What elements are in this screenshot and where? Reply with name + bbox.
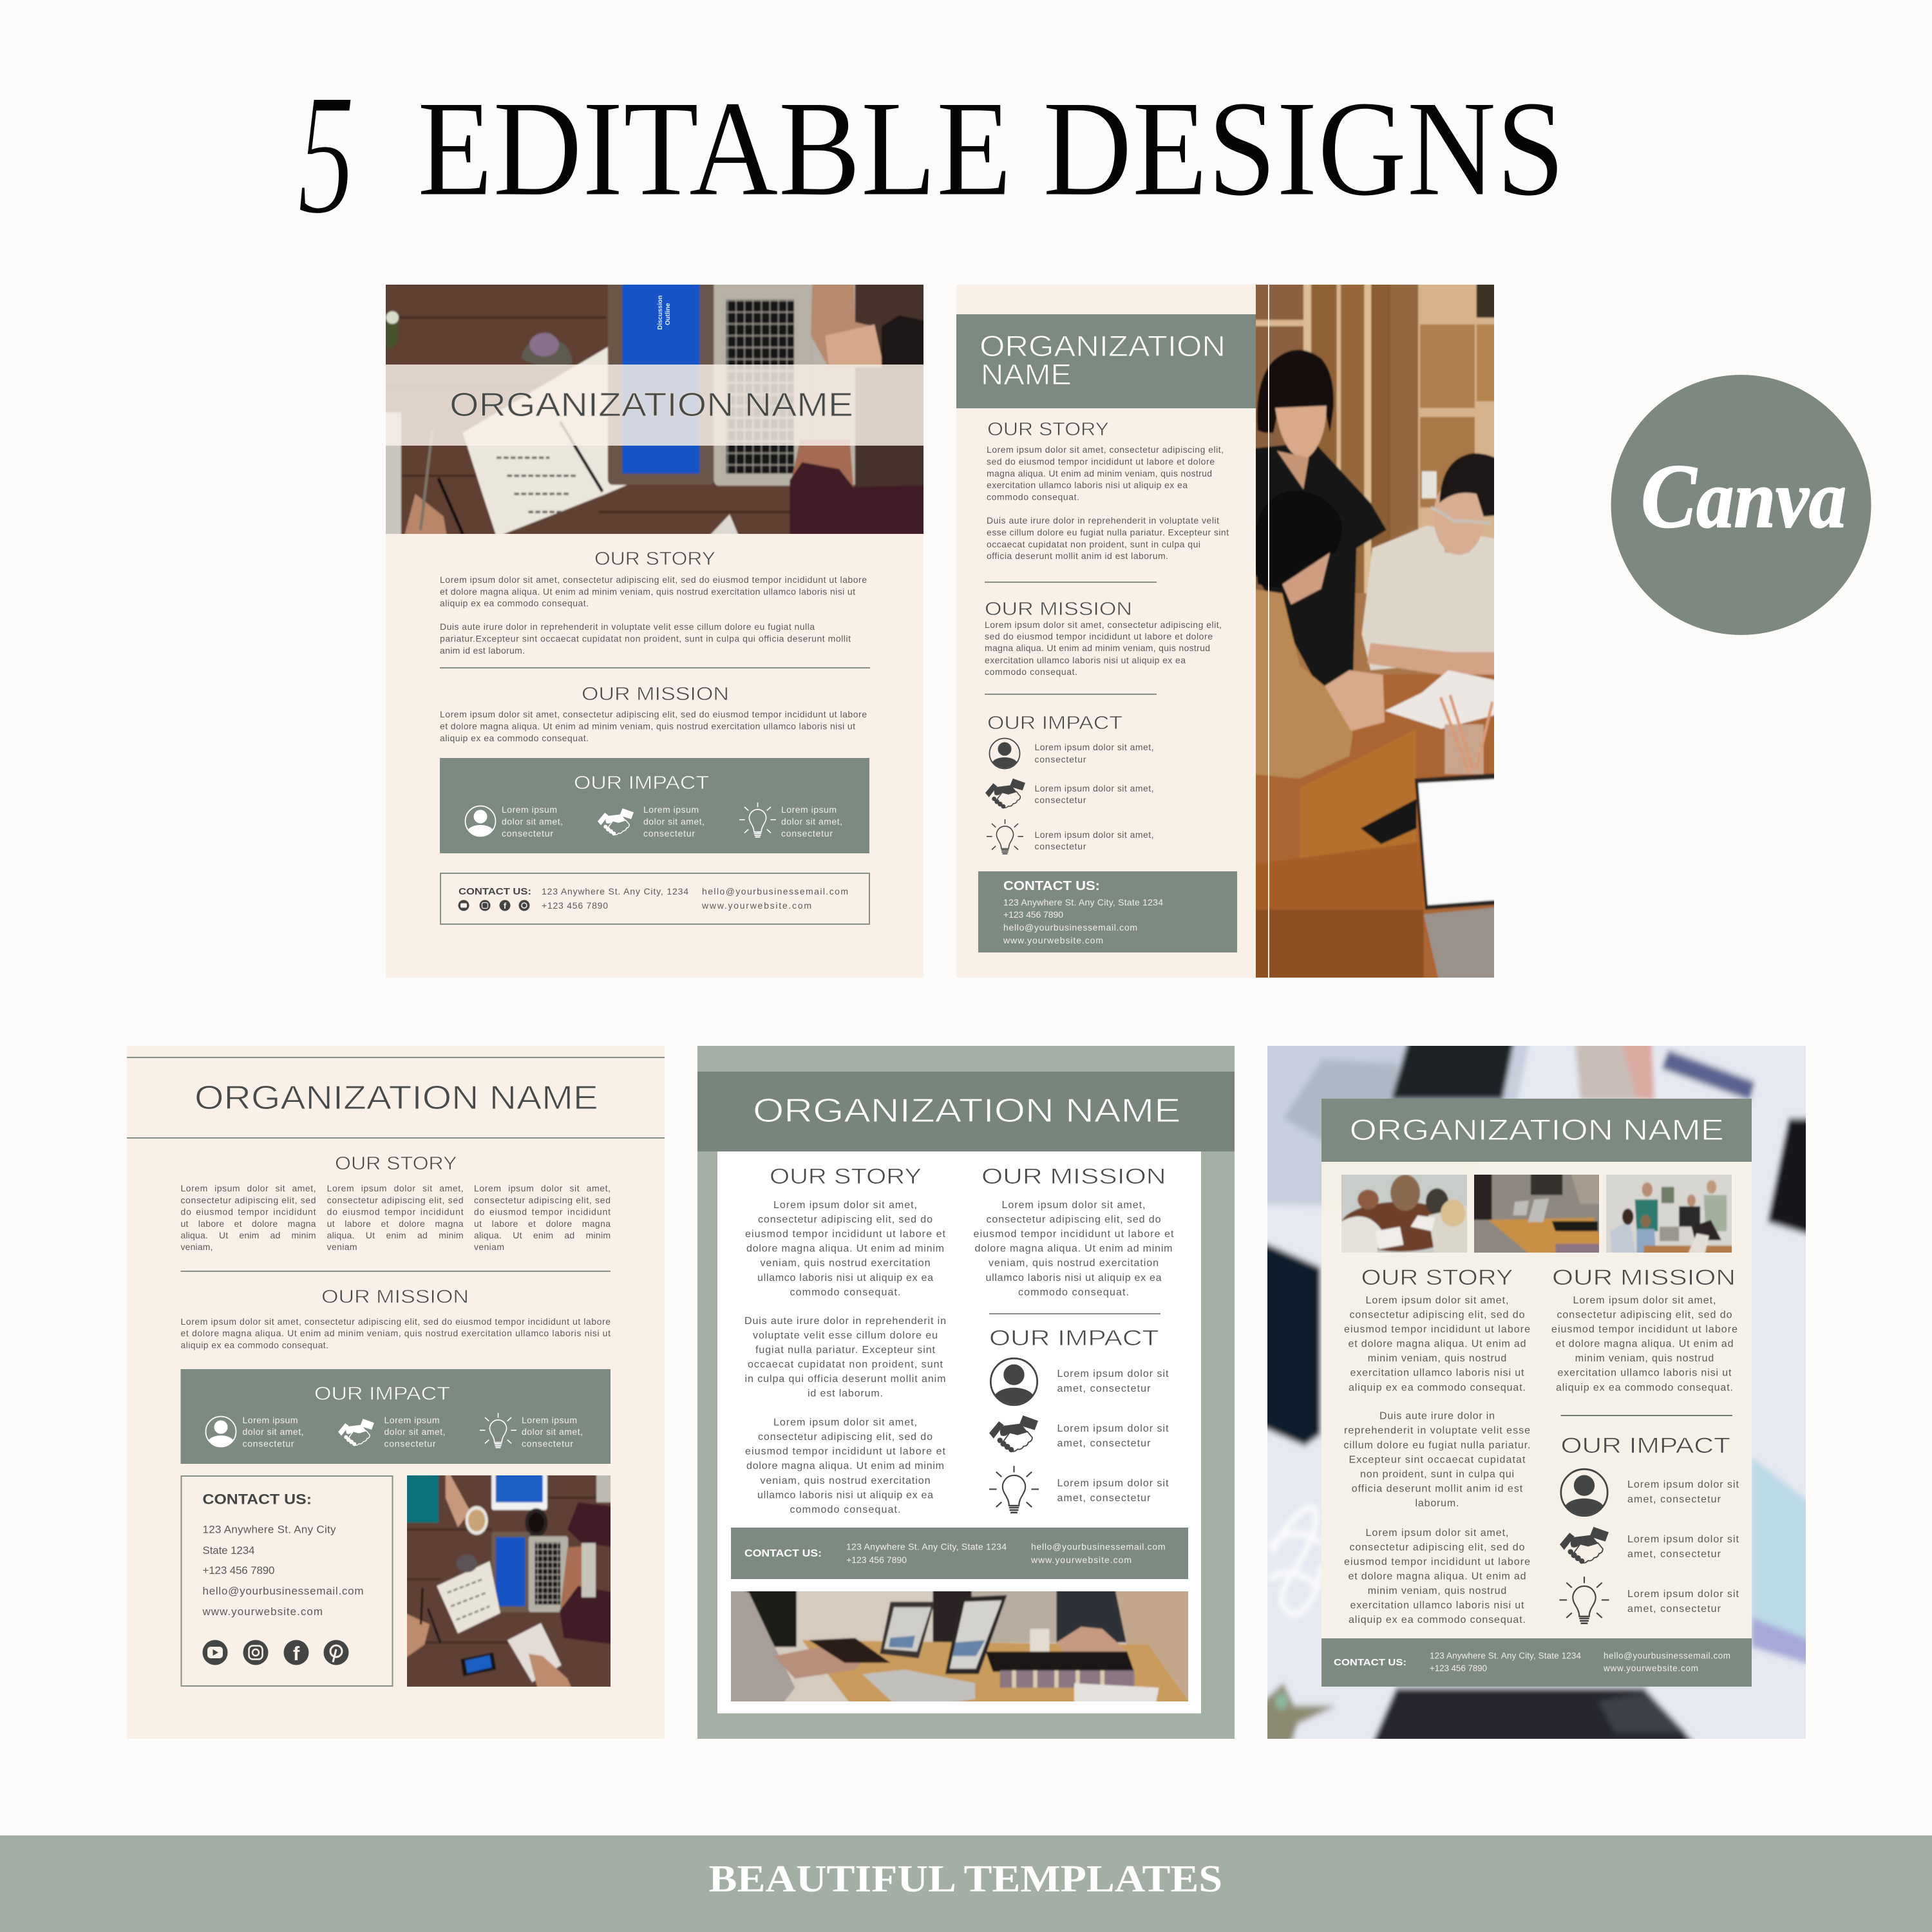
text: story: veniam, quis nostrud exercitation: [760, 1258, 930, 1269]
text: story: eiusmod tempor incididunt ut labore et: [745, 1446, 946, 1457]
contact box: CONTACT US:: [1003, 879, 1100, 893]
text: story: ullamco laboris nisi ut aliquip ex ea: [757, 1273, 933, 1283]
header: organization name: ORGANIZATION NAME: [1350, 1113, 1724, 1146]
text: story: exercitation ullamco laboris nisi ut aliquip ex ea: [987, 480, 1188, 490]
list: impact items: amet, consectetur: [1057, 1383, 1151, 1394]
icon: light bulb: [1560, 1577, 1609, 1624]
list: impact items: Lorem ipsum dolor sit: [1057, 1423, 1169, 1434]
text: story column 2: [327, 1183, 464, 1252]
list: impact items: [1560, 1469, 1739, 1624]
heading: our mission: OUR MISSION: [1552, 1265, 1736, 1290]
list: impact items: Lorem ipsum dolor sit amet,: [1034, 742, 1154, 752]
list: impact items: amet, consectetur: [1627, 1549, 1721, 1560]
text: mission: exercitation ullamco laboris nisi ut aliquip ex ea: [985, 655, 1186, 665]
list: impact items: amet, consectetur: [1627, 1604, 1721, 1615]
icons: social: [202, 1640, 349, 1665]
panel: design 4: [697, 1046, 1235, 1739]
text: story: [744, 1200, 946, 1515]
text: mission: aliquip ex ea commodo consequat.: [180, 1340, 328, 1350]
panel: our impact: OUR IMPACT: [574, 773, 709, 793]
contact box: 123 Anywhere St. Any City: [202, 1524, 336, 1535]
text: story: Lorem ipsum dolor sit amet, consectetur adipiscing elit,: [987, 444, 1224, 455]
text: story column 1: do eiusmod tempor incididunt: [180, 1207, 316, 1217]
title band: [386, 365, 923, 446]
contact bar: [731, 1528, 1188, 1579]
text: story column 3: ut labore et dolore magna: [474, 1218, 611, 1229]
text: story: Duis aute irure dolor in reprehenderit in voluptate velit: [987, 515, 1219, 526]
text: story: Duis aute irure dolor in reprehenderit in: [744, 1316, 946, 1327]
text: story column 3: consectetur adipiscing elit, sed: [474, 1195, 611, 1206]
list: impact items: [989, 1358, 1169, 1513]
contact bar: www.yourwebsite.com: [1030, 1555, 1132, 1565]
text: mission: veniam, quis nostrud exercitation: [989, 1258, 1159, 1269]
text: story column 3: [474, 1183, 611, 1252]
contact bar: 123 Anywhere St. Any City, State 1234: [1430, 1651, 1581, 1660]
contact box: +123 456 7890: [202, 1564, 274, 1577]
panel: our impact: Lorem ipsum: [643, 804, 699, 815]
text: story column 1: ut labore et dolore magna: [180, 1218, 316, 1229]
text: mission: [1551, 1295, 1738, 1394]
header: organization name: NAME: [981, 358, 1072, 391]
panel: our impact: dolor sit amet,: [384, 1426, 446, 1437]
text: story: dolore magna aliqua. Ut enim ad minim: [746, 1243, 944, 1255]
text: mission: et dolore magna aliqua. Ut enim ad: [1556, 1338, 1734, 1350]
text: story: aliquip ex ea commodo consequat.: [1349, 1382, 1526, 1394]
heading: our story: OUR STORY: [987, 419, 1109, 440]
text: story: [987, 444, 1229, 561]
icon: person: [206, 1417, 236, 1446]
text: story: [1343, 1295, 1530, 1625]
heading: our mission: OUR MISSION: [985, 599, 1132, 620]
text: story: et dolore magna aliqua. Ut enim ad: [1349, 1338, 1526, 1350]
text: story: non proident, sunt in culpa qui: [1360, 1469, 1514, 1480]
contact box: CONTACT US:: [202, 1492, 312, 1507]
panel: our impact: Lorem ipsum: [384, 1415, 439, 1425]
footer band: BEAUTIFUL TEMPLATES: [708, 1857, 1222, 1900]
main title: [298, 58, 1565, 251]
heading: organization name: ORGANIZATION NAME: [194, 1079, 598, 1117]
text: mission: eiusmod tempor incididunt ut labore et: [974, 1229, 1174, 1240]
text: story column 1: Lorem ipsum dolor sit amet,: [180, 1183, 316, 1193]
text: story: Lorem ipsum dolor sit amet,: [773, 1200, 917, 1211]
icon: person: [465, 806, 496, 836]
text: story column 1: [180, 1183, 316, 1252]
text: story column 2: do eiusmod tempor incididunt: [327, 1207, 464, 1217]
text: story column 2: ut labore et dolore magna: [327, 1218, 464, 1229]
text: mission: aliquip ex ea commodo consequat.: [1556, 1382, 1733, 1394]
text: mission: aliquip ex ea commodo consequat.: [440, 733, 589, 743]
icon: handshake: [1560, 1527, 1609, 1564]
contact box: 123 Anywhere St. Any City, State 1234: [1003, 897, 1163, 907]
footer band: [0, 1835, 1932, 1932]
header: organization name: ORGANIZATION NAME: [753, 1092, 1181, 1130]
text: mission: dolore magna aliqua. Ut enim ad minim: [975, 1243, 1172, 1255]
list: impact items: Lorem ipsum dolor sit: [1627, 1589, 1739, 1600]
icon: light bulb: [989, 1466, 1039, 1513]
photo: overhead meeting: [407, 1475, 611, 1687]
contact box: [978, 871, 1237, 952]
list: impact items: Lorem ipsum dolor sit: [1057, 1368, 1169, 1379]
text: story: Lorem ipsum dolor sit amet,: [773, 1417, 917, 1428]
text: story column 3: Lorem ipsum dolor sit amet,: [474, 1183, 611, 1193]
contact box: 123 Anywhere St. Any City, 1234: [542, 886, 688, 896]
text: story: commodo consequat.: [987, 492, 1079, 502]
contact box: hello@yourbusinessemail.com: [1003, 922, 1137, 933]
contact box: State 1234: [202, 1544, 255, 1557]
panel: our impact: consectetur: [384, 1439, 436, 1449]
text: story: laborum.: [1416, 1498, 1459, 1509]
contact bar: +123 456 7890: [1430, 1663, 1487, 1673]
panel: our impact: consectetur: [643, 828, 695, 838]
panel: our impact: Lorem ipsum: [522, 1415, 577, 1425]
text: story: aliquip ex ea commodo consequat.: [440, 598, 589, 608]
icon: person: [1561, 1469, 1607, 1516]
panel: our impact: consectetur: [242, 1439, 294, 1449]
text: story column 3: aliqua. Ut enim ad minim: [474, 1230, 611, 1240]
text: story: minim veniam, quis nostrud: [1368, 1586, 1506, 1596]
text: mission: et dolore magna aliqua. Ut enim ad minim veniam, quis nostrud exercitation ullamco laboris nisi ut: [440, 721, 855, 732]
text: story: officia deserunt mollit anim id est: [1352, 1484, 1523, 1494]
panel: our impact: dolor sit amet,: [502, 817, 563, 827]
text: mission: Lorem ipsum dolor sit amet, consectetur adipiscing elit, sed do eiusmod tempor incididunt ut labore: [440, 709, 867, 719]
photo: laptop on wooden desk: Outline: [665, 303, 672, 325]
text: mission: minim veniam, quis nostrud: [1575, 1353, 1714, 1364]
panel: our impact: dolor sit amet,: [781, 817, 842, 827]
text: story: et dolore magna aliqua. Ut enim ad: [1349, 1571, 1526, 1582]
list: impact items: consectetur: [1034, 841, 1086, 851]
text: story column 3: veniam: [474, 1242, 504, 1252]
text: mission: magna aliqua. Ut enim ad minim veniam, quis nostrud: [985, 643, 1210, 653]
contact bar: hello@yourbusinessemail.com: [1031, 1542, 1166, 1552]
panel: design 3: [127, 1046, 665, 1739]
text: story: ullamco laboris nisi ut aliquip ex ea: [757, 1490, 933, 1501]
text: mission: commodo consequat.: [1018, 1287, 1129, 1298]
text: story: voluptate velit esse cillum dolore eu: [753, 1331, 938, 1341]
text: story: occaecat cupidatat non proident, sunt in culpa qui: [987, 539, 1200, 549]
text: mission: ullamco laboris nisi ut aliquip ex ea: [985, 1273, 1162, 1283]
photo: laptops on a table: [731, 1591, 1188, 1701]
icon: handshake: [598, 808, 634, 835]
text: story column 2: consectetur adipiscing elit, sed: [327, 1195, 464, 1206]
contact box: www.yourwebsite.com: [202, 1605, 323, 1618]
photo: team around laptop: [1598, 1168, 1739, 1258]
text: story: veniam, quis nostrud exercitation: [760, 1475, 930, 1486]
contact bar: CONTACT US:: [1334, 1657, 1406, 1668]
contact bar: [1321, 1638, 1752, 1687]
text: story column 2: Lorem ipsum dolor sit amet,: [327, 1183, 464, 1193]
panel: our impact: [440, 758, 869, 853]
text: story column 2: aliqua. Ut enim ad minim: [327, 1230, 464, 1240]
text: story: exercitation ullamco laboris nisi ut: [1350, 1600, 1524, 1611]
text: story: eiusmod tempor incididunt ut labore et: [745, 1229, 946, 1240]
contact box: hello@yourbusinessemail.com: [702, 886, 848, 896]
photo: team meeting: [1333, 1168, 1474, 1258]
text: story: exercitation ullamco laboris nisi ut: [1350, 1368, 1524, 1378]
panel: design 1: [373, 268, 947, 978]
badge: Canva: Canva: [1641, 445, 1846, 547]
text: story: id est laborum.: [808, 1388, 883, 1399]
text: story: pariatur.Excepteur sint occaecat cupidatat non proident, sunt in culpa qui officia deserunt mollit: [440, 634, 851, 644]
text: story: Excepteur sint occaecat cupidatat: [1349, 1454, 1526, 1466]
contact bar: 123 Anywhere St. Any City, State 1234: [846, 1542, 1007, 1552]
icon: handshake: [989, 1416, 1038, 1452]
list: impact items: Lorem ipsum dolor sit: [1627, 1534, 1739, 1545]
photo: team around a table: [1256, 285, 1494, 978]
badge: Canva: [1611, 375, 1871, 635]
list: impact items: consectetur: [1034, 754, 1086, 764]
header: organization name: [697, 1072, 1235, 1151]
text: story column 1: veniam,: [180, 1242, 213, 1252]
contact box: www.yourwebsite.com: [701, 900, 811, 911]
text: story: occaecat cupidatat non proident, sunt: [748, 1359, 943, 1370]
heading: our story: OUR STORY: [770, 1164, 922, 1189]
text: story: minim veniam, quis nostrud: [1368, 1353, 1506, 1364]
text: story: magna aliqua. Ut enim ad minim veniam, quis nostrud: [987, 468, 1212, 478]
list: impact items: Lorem ipsum dolor sit: [1057, 1478, 1169, 1489]
heading: our story: OUR STORY: [594, 549, 715, 569]
text: story: commodo consequat.: [790, 1287, 900, 1298]
text: story: reprehenderit in voluptate velit esse: [1344, 1425, 1530, 1436]
icons: social: [459, 900, 529, 911]
header: organization name: [1321, 1099, 1752, 1162]
heading: our mission: OUR MISSION: [981, 1164, 1166, 1189]
photo: laptops on a table: [1467, 1168, 1605, 1258]
panel: our impact: dolor sit amet,: [522, 1426, 583, 1437]
text: mission: Lorem ipsum dolor sit amet,: [1002, 1200, 1145, 1211]
text: story: anim id est laborum.: [440, 645, 525, 656]
header: organization name: ORGANIZATION: [980, 330, 1226, 363]
icon: handshake: [985, 779, 1025, 809]
heading: our mission: OUR MISSION: [321, 1287, 469, 1307]
text: story: commodo consequat.: [790, 1504, 900, 1515]
text: mission: Lorem ipsum dolor sit amet, consectetur adipiscing elit,: [985, 620, 1222, 630]
content card: [1321, 1099, 1752, 1687]
text: mission: et dolore magna aliqua. Ut enim ad minim veniam, quis nostrud exercitation ullamco laboris nisi ut: [180, 1328, 611, 1338]
contact box: +123 456 7890: [1003, 909, 1063, 920]
contact bar: CONTACT US:: [744, 1548, 822, 1559]
text: mission: [180, 1316, 611, 1350]
contact bar: +123 456 7890: [846, 1555, 907, 1565]
text: mission: Lorem ipsum dolor sit amet, consectetur adipiscing elit, sed do eiusmod tempor incididunt ut labore: [180, 1316, 611, 1327]
contact box: +123 456 7890: [542, 900, 608, 911]
list: impact items: Lorem ipsum dolor sit: [1627, 1479, 1739, 1490]
contact box: [182, 1476, 393, 1686]
heading: our story: OUR STORY: [335, 1153, 457, 1174]
icon: person: [989, 738, 1020, 769]
contact box: [440, 873, 869, 924]
text: story: esse cillum dolore eu fugiat nulla pariatur. Excepteur sint: [987, 527, 1229, 537]
panel: our impact: consectetur: [502, 828, 553, 838]
heading: our mission: OUR MISSION: [582, 684, 729, 705]
icon: person: [990, 1358, 1037, 1405]
text: story column 1: aliqua. Ut enim ad minim: [180, 1230, 316, 1240]
text: mission: [985, 620, 1222, 677]
text: story column 3: do eiusmod tempor incididunt: [474, 1207, 611, 1217]
panel: our impact: Lorem ipsum: [781, 804, 837, 815]
text: story column 2: veniam: [327, 1242, 357, 1252]
text: story: consectetur adipiscing elit, sed do: [758, 1432, 933, 1443]
panel: our impact: consectetur: [522, 1439, 573, 1449]
panel: our impact: OUR IMPACT: [314, 1383, 450, 1404]
text: mission: commodo consequat.: [985, 667, 1077, 677]
text: story: Duis aute irure dolor in: [1379, 1410, 1495, 1422]
panel: design 2: [956, 268, 1519, 991]
text: story: eiusmod tempor incididunt ut labore: [1344, 1557, 1530, 1567]
list: impact items: Lorem ipsum dolor sit amet,: [1034, 829, 1154, 840]
heading: our story: OUR STORY: [1361, 1265, 1513, 1290]
text: mission: sed do eiusmod tempor incididunt ut labore et dolore: [985, 631, 1213, 641]
panel: our impact: Lorem ipsum: [242, 1415, 298, 1425]
text: story: Lorem ipsum dolor sit amet,: [1365, 1295, 1508, 1306]
panel: design 5: [1248, 1019, 1828, 1769]
text: mission: eiusmod tempor incididunt ut labore: [1551, 1324, 1738, 1335]
text: story: in culpa qui officia deserunt mollit anim: [744, 1374, 945, 1385]
main title: 5: [298, 58, 355, 251]
list: impact items: amet, consectetur: [1057, 1493, 1151, 1504]
main title: EDITABLE DESIGNS: [417, 73, 1565, 225]
list: impact items: amet, consectetur: [1057, 1438, 1151, 1449]
photo: laptop on wooden desk: Discussion: [657, 296, 664, 330]
contact bar: hello@yourbusinessemail.com: [1604, 1651, 1730, 1660]
text: mission: exercitation ullamco laboris nisi ut: [1557, 1368, 1732, 1378]
list: impact items: consectetur: [1034, 795, 1086, 805]
text: story: sed do eiusmod tempor incididunt ut labore et dolore: [987, 456, 1215, 466]
background photo: designer desk: [1248, 1019, 1828, 1769]
text: story: et dolore magna aliqua. Ut enim ad minim veniam, quis nostrud exercitation ullamco laboris nisi ut: [440, 586, 855, 596]
text: story: Lorem ipsum dolor sit amet, consectetur adipiscing elit, sed do eiusmod tempor incididunt ut labore: [440, 574, 867, 585]
panel: our impact: Lorem ipsum: [502, 804, 557, 815]
text: story: Lorem ipsum dolor sit amet,: [1365, 1528, 1508, 1539]
icon: handshake: [338, 1419, 374, 1446]
heading: organization name: ORGANIZATION NAME: [450, 386, 853, 424]
contact bar: www.yourwebsite.com: [1603, 1663, 1698, 1673]
panel: our impact: consectetur: [781, 828, 833, 838]
heading: our impact: OUR IMPACT: [987, 713, 1122, 734]
panel: our impact: [180, 1369, 611, 1464]
text: story: Duis aute irure dolor in reprehenderit in voluptate velit esse cillum dolore eu fugiat nulla: [440, 621, 815, 632]
heading: our impact: OUR IMPACT: [989, 1326, 1159, 1350]
list: impact items: amet, consectetur: [1627, 1494, 1721, 1505]
panel: our impact: dolor sit amet,: [242, 1426, 304, 1437]
text: story: [440, 574, 867, 656]
text: story: eiusmod tempor incididunt ut labore: [1344, 1324, 1530, 1335]
text: story: consectetur adipiscing elit, sed do: [1350, 1310, 1525, 1320]
text: story column 1: consectetur adipiscing elit, sed: [180, 1195, 316, 1206]
panel: our impact: dolor sit amet,: [643, 817, 705, 827]
contact box: hello@yourbusinessemail.com: [202, 1585, 363, 1597]
list: impact items: [985, 738, 1154, 854]
photo: laptop on wooden desk: [386, 285, 923, 534]
text: story: fugiat nulla pariatur. Excepteur sint: [755, 1345, 936, 1356]
heading: our impact: OUR IMPACT: [1561, 1434, 1730, 1458]
text: story: officia deserunt mollit anim id est laborum.: [987, 551, 1168, 561]
header: organization name: [956, 314, 1256, 408]
text: story: consectetur adipiscing elit, sed do: [758, 1215, 933, 1225]
text: mission: consectetur adipiscing elit, sed do: [1557, 1310, 1732, 1320]
list: impact items: Lorem ipsum dolor sit amet,: [1034, 783, 1154, 793]
contact box: www.yourwebsite.com: [1003, 935, 1103, 945]
text: mission: [974, 1200, 1174, 1298]
icons: social: f: [293, 1642, 300, 1665]
text: story: dolore magna aliqua. Ut enim ad minim: [746, 1461, 944, 1472]
text: mission: [440, 709, 867, 743]
icon: light bulb: [739, 802, 776, 837]
icons: social: f: [504, 901, 507, 911]
text: mission: Lorem ipsum dolor sit amet,: [1573, 1295, 1716, 1306]
text: story: cillum dolore eu fugiat nulla pariatur.: [1343, 1440, 1530, 1451]
text: story: aliquip ex ea commodo consequat.: [1349, 1615, 1526, 1625]
icon: light bulb: [480, 1413, 516, 1448]
contact box: CONTACT US:: [459, 887, 531, 897]
icon: light bulb: [987, 819, 1023, 854]
text: story: consectetur adipiscing elit, sed do: [1350, 1542, 1525, 1553]
text: mission: consectetur adipiscing elit, sed do: [987, 1215, 1161, 1225]
